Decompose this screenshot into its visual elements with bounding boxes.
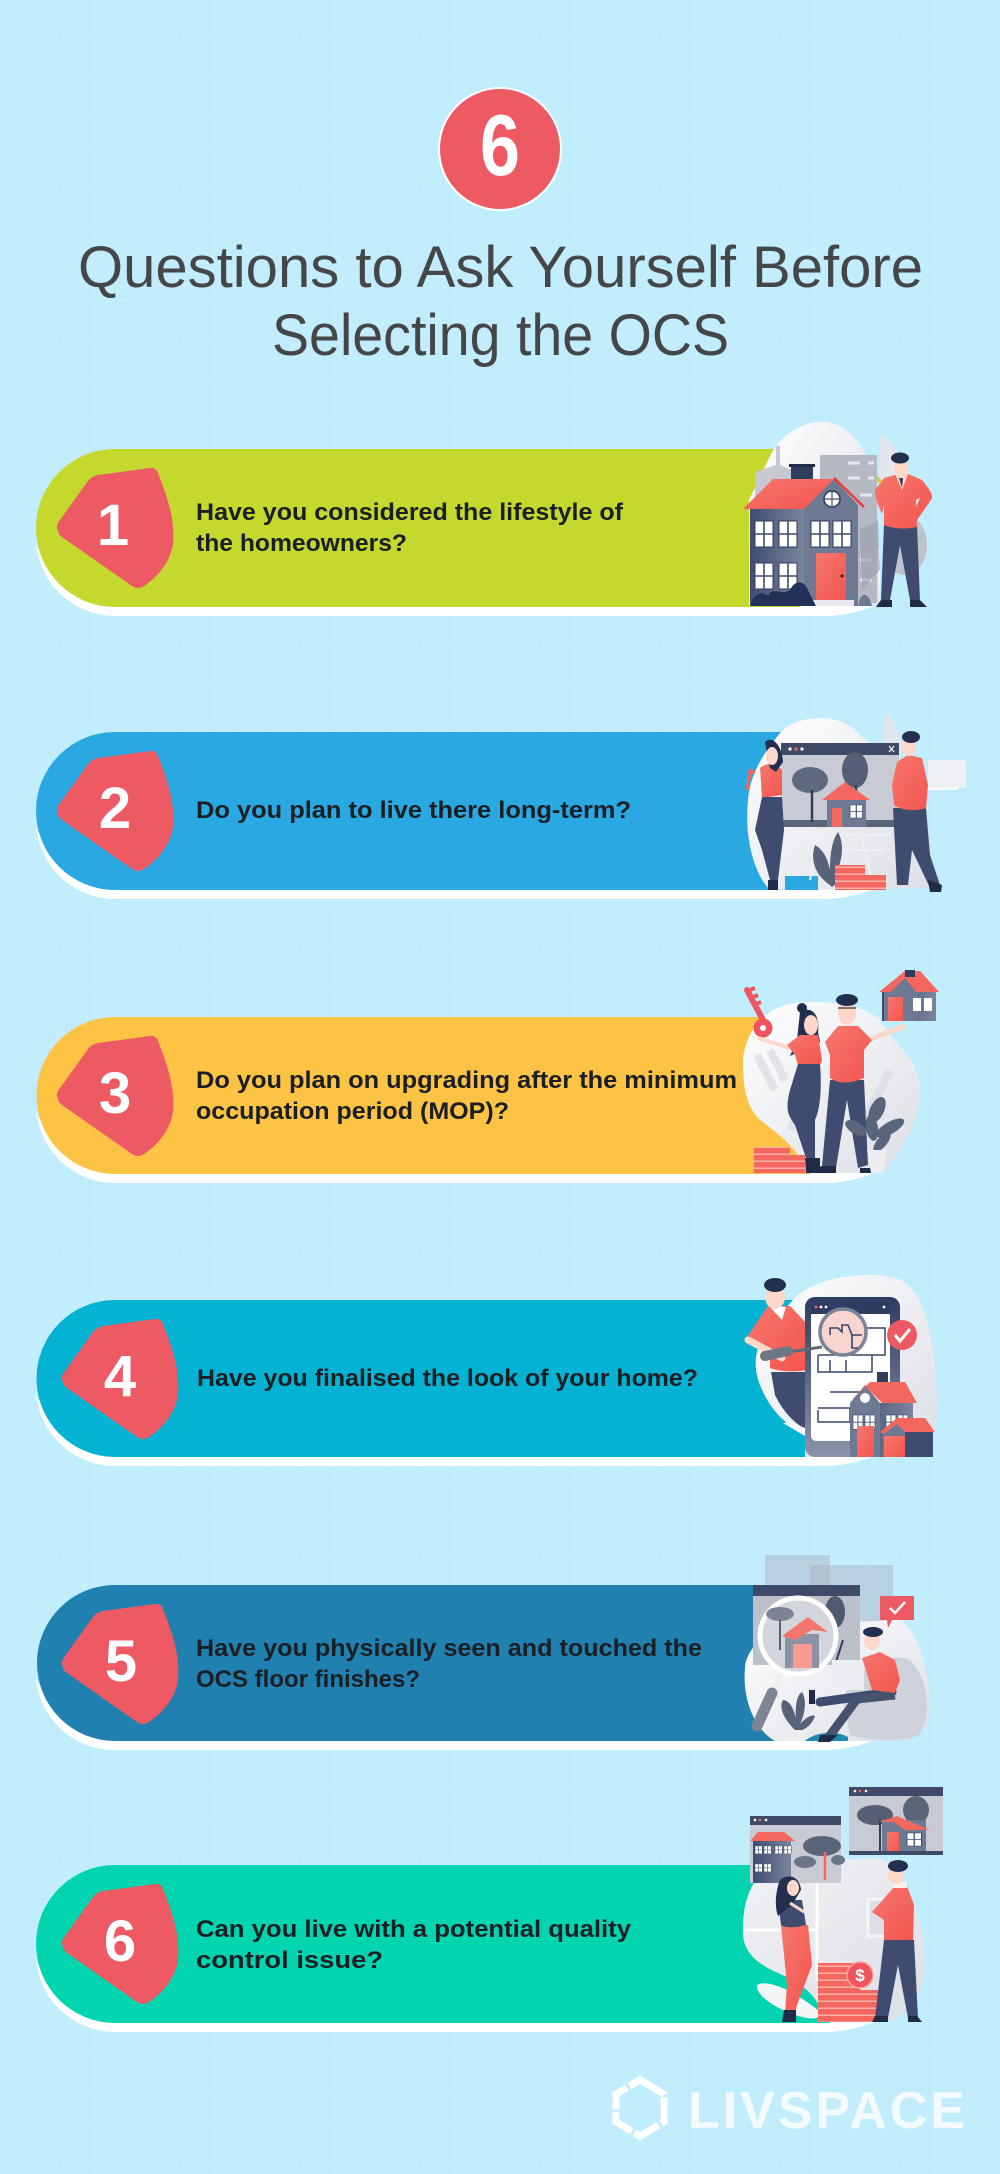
question text: Do you plan to live there long-term?: [196, 797, 631, 824]
badge 6: 6: [104, 1909, 136, 1974]
panel: question 3: [36, 970, 939, 1183]
question text: Have you physically seen and touched the: [196, 1635, 702, 1662]
badge 5: 5: [105, 1629, 137, 1694]
question text: [196, 499, 624, 557]
badge 6: [62, 1884, 178, 2004]
badge 1: 1: [97, 493, 129, 558]
badge 1: [57, 468, 173, 588]
pill: [36, 1865, 880, 2032]
badge 2: [57, 751, 173, 871]
pill: [36, 449, 880, 616]
panel: question 6: [36, 1787, 943, 2032]
question text: occupation period (MOP)?: [196, 1098, 509, 1125]
badge 2: 2: [99, 776, 131, 841]
badge 4: 4: [104, 1344, 136, 1409]
badge 3: 3: [99, 1061, 131, 1126]
badge 5: [62, 1604, 178, 1724]
illustration: couple with coins and house windows: $: [855, 1966, 865, 1985]
panel: question 2: [36, 713, 966, 899]
panel: question 1: [36, 422, 932, 616]
question text: [196, 1635, 702, 1693]
question text: Have you considered the lifestyle of: [196, 499, 624, 526]
illustration: house and man: [743, 422, 932, 607]
title: [78, 235, 923, 368]
question text: Do you plan on upgrading after the minimum: [196, 1067, 737, 1094]
question text: [196, 1067, 737, 1125]
logo wordmark: LIVSPACE: [688, 2082, 965, 2140]
question text: OCS floor finishes?: [196, 1666, 420, 1693]
pill: [36, 1017, 880, 1183]
number circle: 6: [480, 98, 520, 194]
logo mark: [616, 2080, 664, 2136]
illustration: man in beanbag with magnifier: [745, 1555, 930, 1742]
question text: [196, 1916, 632, 1974]
panel: question 4: [36, 1275, 937, 1466]
title: Selecting the OCS: [272, 303, 729, 368]
illustration: couple with coins and house windows: [743, 1787, 943, 2022]
number circle: [438, 87, 562, 211]
pill: [36, 1585, 880, 1750]
pill: [36, 1300, 880, 1466]
badge 4: [62, 1319, 178, 1439]
title: Questions to Ask Yourself Before: [78, 235, 923, 300]
question text: Can you live with a potential quality: [196, 1916, 632, 1943]
illustration: couple with key and house: [743, 970, 939, 1173]
badge 3: [57, 1036, 173, 1156]
panel: question 5: [36, 1555, 930, 1750]
logo: [616, 2080, 664, 2136]
illustration: man inspecting floor plan on phone: [745, 1275, 937, 1457]
question text: control issue?: [196, 1947, 383, 1974]
illustration: couple with house window: [747, 713, 966, 892]
question text: Have you finalised the look of your home?: [197, 1365, 698, 1392]
question text: the homeowners?: [196, 530, 407, 557]
pill: [36, 732, 880, 899]
